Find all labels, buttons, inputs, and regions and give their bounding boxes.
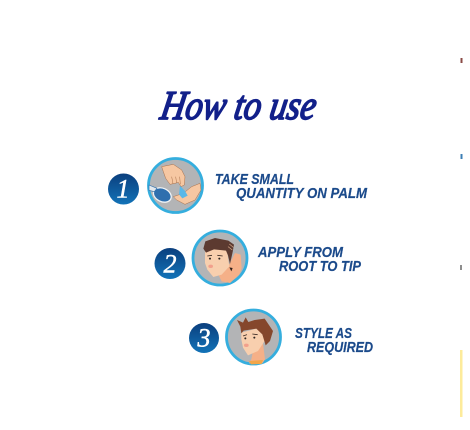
step 2	[154, 231, 361, 285]
step 3 instruction: STYLE AS	[295, 326, 352, 342]
title: How to use	[157, 82, 320, 128]
step 2 number badge: 2	[164, 250, 176, 278]
step 1 instruction: TAKE SMALL	[215, 172, 294, 188]
step 1 number badge	[108, 174, 139, 204]
step 1 instruction	[215, 172, 368, 202]
step 1 number badge: 1	[116, 174, 130, 204]
icon: man with styled hair	[226, 310, 280, 364]
step 1	[108, 158, 368, 212]
step 2 instruction: ROOT TO TIP	[279, 259, 361, 275]
step 3	[189, 310, 373, 364]
icon: man applying product to hair	[193, 231, 247, 285]
step 3 number badge: 3	[196, 324, 210, 352]
step 3 instruction: REQUIRED	[307, 340, 373, 356]
right edge fragments	[460, 58, 462, 417]
step 2 instruction: APPLY FROM	[257, 245, 344, 261]
step 3 instruction	[295, 326, 373, 356]
step 1 instruction: QUANTITY ON PALM	[236, 186, 368, 202]
step 2 instruction	[257, 245, 361, 275]
icon: hands and jar	[148, 158, 202, 212]
step 3 number badge	[189, 323, 219, 353]
step 2 number badge	[154, 248, 186, 279]
